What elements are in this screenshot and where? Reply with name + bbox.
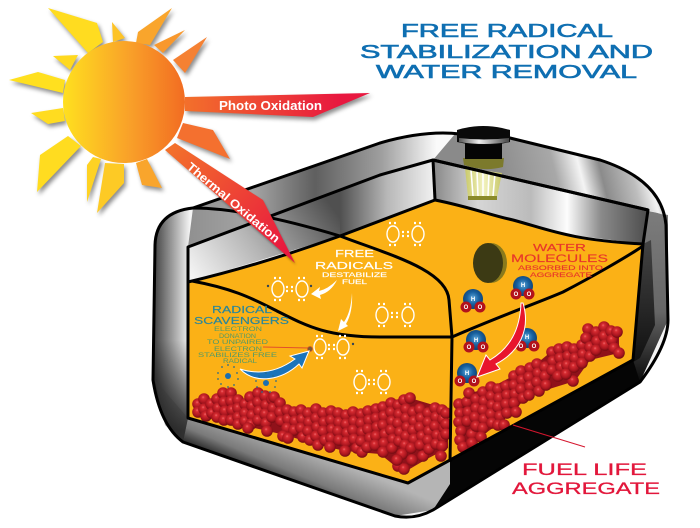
callout: free radicals (315, 249, 394, 286)
sun rays (9, 8, 370, 213)
description: DONATION (219, 333, 256, 340)
arrow: electron donation (240, 351, 309, 379)
description: ELECTRON (214, 346, 262, 353)
water molecule (460, 289, 486, 312)
callout: radical scavengers (194, 305, 289, 365)
arrow: water to aggregate (477, 303, 525, 377)
molecule (354, 371, 390, 393)
tank body (153, 133, 668, 517)
water molecule: O (458, 379, 463, 385)
title: STABILIZATION AND (360, 42, 653, 62)
callout: free radicals: FREE (335, 249, 374, 260)
filler cap and filter (433, 126, 648, 210)
water molecule: O (472, 379, 477, 385)
leader line: fuel life aggregate (513, 425, 585, 447)
water molecule: O (527, 292, 532, 298)
molecule (314, 336, 354, 358)
water molecule: H (471, 297, 475, 303)
water molecule: O (467, 345, 472, 351)
callout: water molecules: WATER (533, 243, 586, 254)
water molecule: O (532, 344, 537, 350)
arrow: to upper radical (311, 280, 337, 299)
label: fuel life aggregate: FUEL LIFE (522, 460, 647, 479)
sun (9, 8, 370, 213)
callout: water molecules: AGGREGATE (530, 272, 593, 279)
water molecule (516, 328, 540, 352)
water molecule: O (478, 305, 483, 311)
description: STABILIZES FREE (198, 352, 277, 359)
heading: SCAVENGERS (194, 316, 289, 327)
fuel tank (153, 126, 668, 517)
arrow: to lower radical (338, 293, 352, 331)
water molecule: O (481, 345, 486, 351)
water molecule: O (519, 344, 524, 350)
cap (465, 142, 502, 159)
ray: thermal oxidation (165, 143, 295, 263)
molecule (376, 304, 414, 326)
callout: free radicals: DESTABILIZE (322, 273, 387, 279)
heading (194, 305, 289, 327)
water molecule: O (464, 305, 469, 311)
title: WATER REMOVAL (376, 62, 637, 82)
callout: free radicals: RADICALS (315, 261, 394, 272)
top band (188, 133, 460, 247)
sun disc (63, 41, 185, 163)
water molecule: O (514, 292, 519, 298)
water molecule (464, 330, 488, 352)
water molecule (454, 363, 480, 386)
water molecule: H (465, 371, 469, 377)
ray: photo oxidation (185, 93, 370, 117)
callout: water molecules: MOLECULES (511, 253, 608, 265)
water molecule: H (525, 335, 529, 341)
water molecule (510, 276, 534, 300)
title: FREE RADICAL (401, 21, 613, 41)
back wall (188, 190, 340, 282)
description: ELECTRON (214, 326, 262, 333)
scavenger atoms (217, 364, 277, 393)
callout: water molecules: ABSORBED INTO (518, 265, 603, 272)
free radical molecules (267, 223, 424, 393)
filter (465, 168, 502, 197)
water molecules (454, 276, 540, 386)
heading: RADICAL (212, 305, 273, 316)
tank outlines (153, 133, 668, 517)
fuel (188, 200, 643, 483)
callout: free radicals: FUEL (342, 280, 368, 286)
aggregate underlay (198, 326, 619, 470)
callout: water molecules (511, 243, 608, 279)
label: fuel life aggregate (512, 460, 660, 498)
label: fuel life aggregate: AGGREGATE (512, 479, 660, 498)
description: TO UNPAIRED (207, 339, 269, 346)
molecule (267, 278, 312, 300)
molecule (387, 223, 424, 245)
label: thermal oxidation: Thermal Oxidation (184, 160, 283, 246)
inlet hole (473, 243, 507, 283)
title (360, 21, 653, 82)
description: RADICAL (223, 358, 258, 365)
water molecule: H (521, 283, 525, 289)
aggregate particles (192, 321, 625, 475)
water molecule: H (474, 338, 478, 344)
description (198, 326, 277, 365)
label: photo oxidation: Photo Oxidation (219, 98, 322, 113)
leader line: unpaired electron (263, 346, 312, 352)
